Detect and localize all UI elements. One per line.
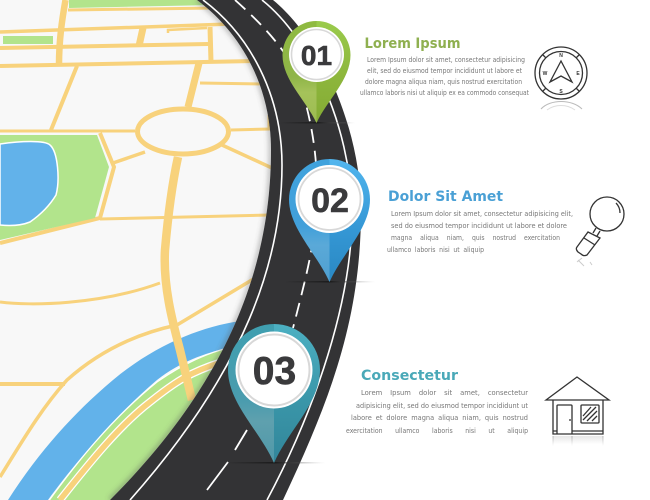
road: left line bbox=[130, 0, 282, 500]
body 2: Lorem Ipsum dolor sit amet, consectetur adipisicing elit, bbox=[391, 210, 573, 218]
panel: city map bbox=[0, 0, 300, 500]
body 2 bbox=[387, 210, 573, 254]
number 01: 01 bbox=[301, 40, 332, 71]
road: centre dashes bbox=[207, 0, 317, 490]
number 02: 02 bbox=[311, 182, 349, 220]
body 2: ullamco laboris nisi ut aliquip bbox=[387, 246, 484, 254]
heading 2: Dolor Sit Amet bbox=[388, 189, 503, 205]
body 3: labore et dolore magna aliqua niam, quis nostrud bbox=[351, 414, 528, 422]
icon: compass: E bbox=[576, 71, 580, 77]
park: small top-left bbox=[3, 36, 53, 44]
pin 03 bbox=[225, 324, 325, 464]
main avenue bbox=[165, 157, 192, 400]
heading 1: Lorem Ipsum bbox=[364, 36, 460, 52]
park with lake bbox=[0, 133, 114, 243]
body 3: exercitation ullamco laboris nisi ut aliquip bbox=[346, 427, 528, 435]
body 3: adipisicing elit, sed do eiusmod tempor incididunt ut bbox=[356, 402, 528, 410]
icon: compass bbox=[535, 47, 587, 110]
body 1: elit, sed do eiusmod tempor incididunt ut labore et bbox=[367, 67, 522, 75]
map edge shadow bbox=[110, 0, 271, 500]
body 3 bbox=[346, 389, 528, 435]
river bbox=[8, 321, 240, 500]
icon: magnifier bbox=[576, 197, 624, 266]
number 03: 03 bbox=[253, 350, 296, 393]
road bbox=[110, 0, 361, 500]
body 2: magna aliqua niam, quis nostrud exercitation bbox=[391, 234, 560, 242]
icon: compass: S bbox=[559, 89, 563, 95]
street grid bbox=[0, 0, 272, 477]
pin 01 bbox=[280, 21, 355, 124]
road: right line bbox=[262, 0, 352, 500]
bank road bbox=[60, 362, 222, 500]
icon: compass: N bbox=[559, 53, 563, 59]
body 3: Lorem Ipsum dolor sit amet, consectetur bbox=[361, 389, 528, 397]
body 1: ullamco laboris nisi ut aliquip ex ea commodo consequat bbox=[360, 89, 529, 97]
body 1 bbox=[360, 56, 529, 97]
roundabout bbox=[138, 109, 228, 154]
green river bank bbox=[50, 348, 223, 500]
pin 02 bbox=[285, 159, 375, 282]
body 1: dolore magna aliqua niam, quis nostrud exercitation bbox=[365, 78, 522, 86]
body 1: Lorem Ipsum dolor sit amet, consectetur adipisicing bbox=[367, 56, 525, 64]
heading 3: Consectetur bbox=[361, 368, 458, 384]
text block 2 bbox=[387, 189, 573, 254]
icon: compass: W bbox=[543, 71, 548, 77]
text block 1 bbox=[360, 36, 529, 97]
park: top bbox=[69, 0, 215, 8]
icon: house bbox=[546, 377, 609, 446]
body 2: sed do eiusmod tempor incididunt ut labore et dolore bbox=[391, 222, 567, 230]
text block 3 bbox=[346, 368, 528, 435]
